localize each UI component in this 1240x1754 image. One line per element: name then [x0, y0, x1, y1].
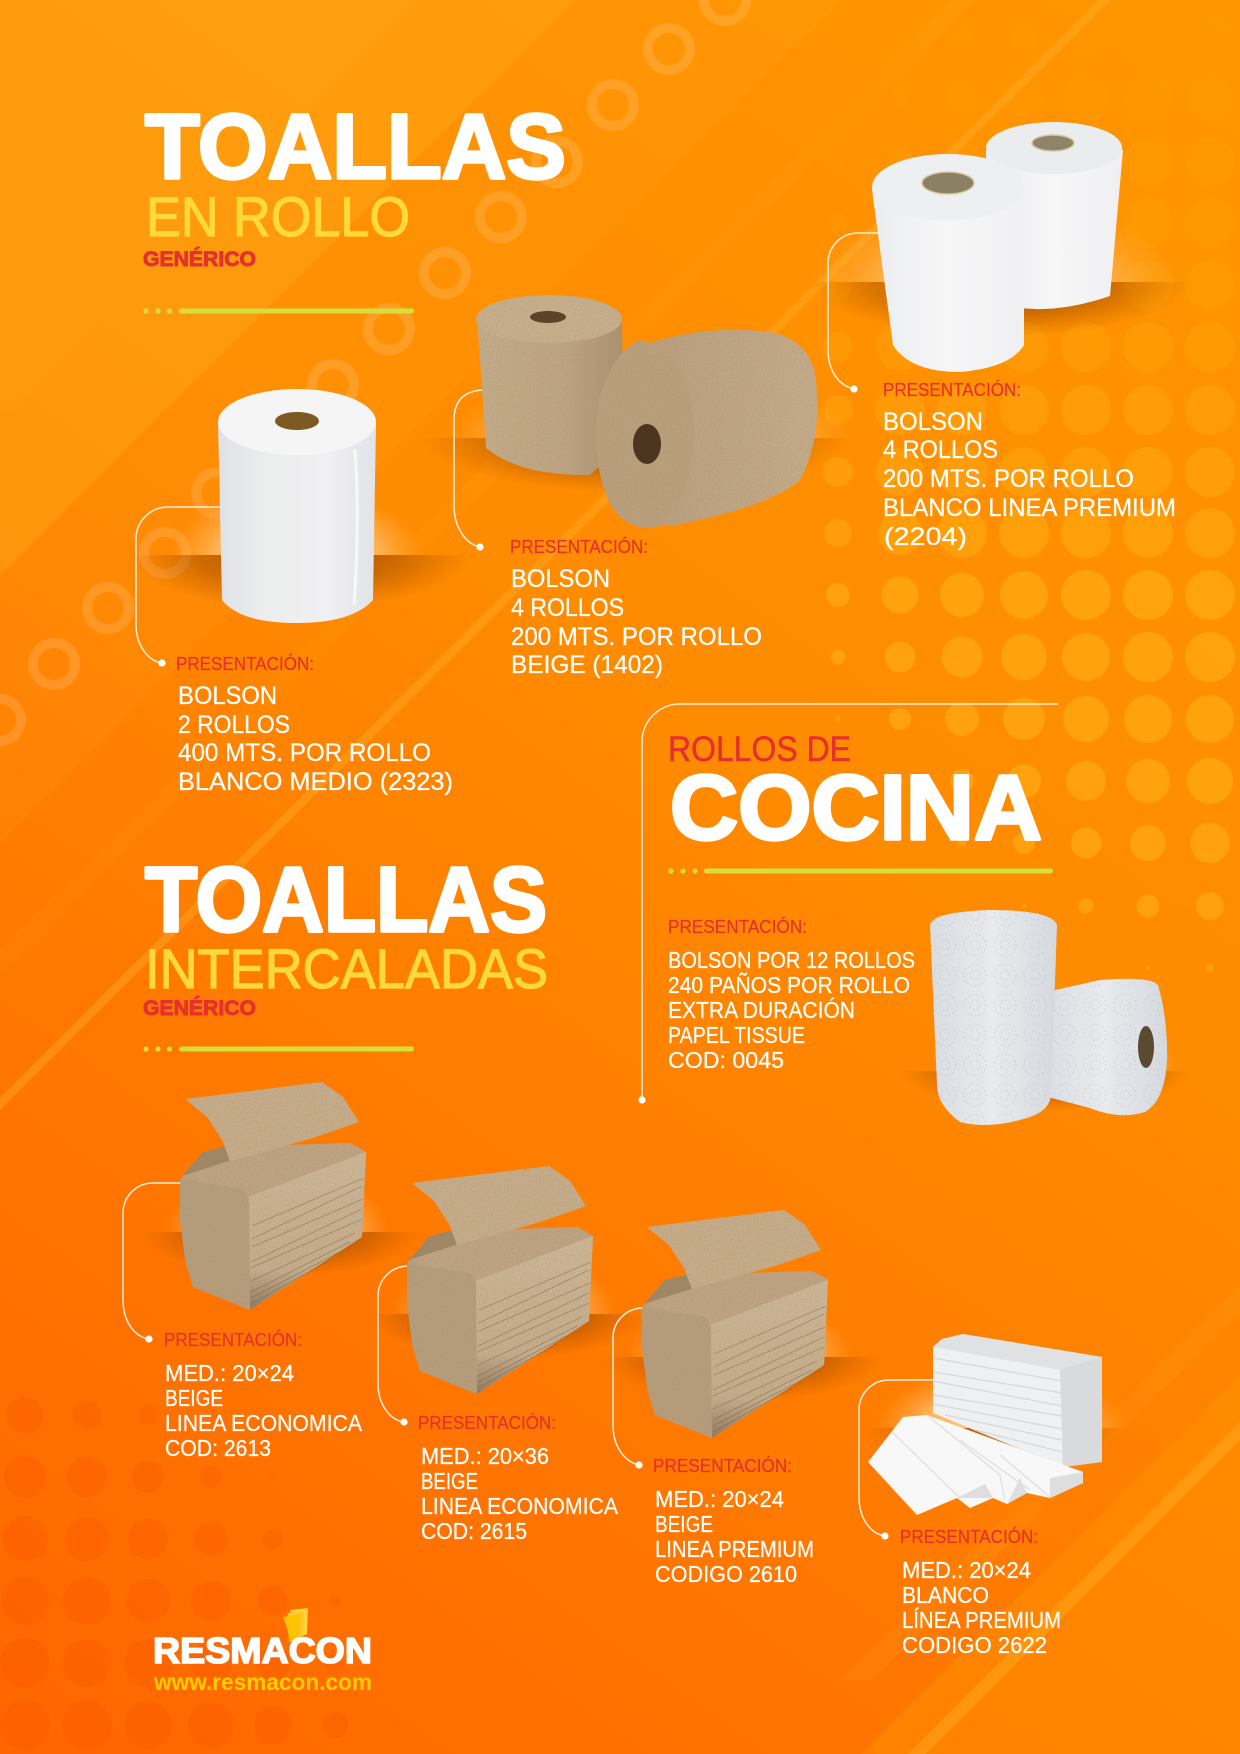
logo: resmacon [153, 1608, 372, 1695]
text: presentacion 2615: PRESENTACIÓN: [418, 1412, 556, 1433]
text: presentacion 2610: LINEA PREMIUM [655, 1536, 814, 1562]
text: presentacion 1402 [510, 536, 762, 679]
text: presentacion 2323: 2 ROLLOS [178, 711, 290, 739]
text: presentacion 2615: LINEA ECONOMICA [421, 1493, 618, 1519]
text: presentacion 2615: COD: 2615 [421, 1518, 527, 1544]
logo: resmacon: www.resmacon.com [153, 1669, 372, 1695]
text: presentacion 2613: COD: 2613 [165, 1435, 271, 1461]
heading: toallas intercaladas: GENÉRICO [143, 997, 256, 1020]
text: presentacion 2622 [900, 1526, 1061, 1658]
text: presentacion cocina: EXTRA DURACIÓN [668, 997, 855, 1023]
divider: en rollo [143, 308, 414, 314]
text: presentacion 2323: 400 MTS. POR ROLLO [178, 739, 431, 767]
text: presentacion 1402: 4 ROLLOS [511, 594, 624, 622]
text: presentacion 2610: CODIGO 2610 [655, 1561, 797, 1587]
divider: intercaladas [143, 1046, 414, 1052]
text: presentacion 2204: PRESENTACIÓN: [883, 379, 1021, 400]
callout line: cocina [642, 704, 1058, 1100]
text: presentacion 2613: PRESENTACIÓN: [164, 1329, 302, 1350]
text: presentacion 2204: BLANCO LINEA PREMIUM [883, 494, 1176, 522]
text: presentacion 2204: 4 ROLLOS [883, 436, 998, 464]
heading: toallas en rollo: EN ROLLO [146, 185, 410, 248]
text: presentacion 2622: CODIGO 2622 [902, 1632, 1047, 1658]
text: presentacion cocina: COD: 0045 [668, 1047, 784, 1073]
heading: rollos de cocina: COCINA [670, 757, 1042, 859]
text: presentacion 2615 [418, 1412, 618, 1544]
product: rolls white 2204 [810, 120, 1190, 393]
text: presentacion 2204: (2204) [884, 523, 967, 551]
text: presentacion 1402: PRESENTACIÓN: [510, 536, 648, 557]
text: presentacion cocina: BOLSON POR 12 ROLLOS [668, 947, 915, 973]
text: presentacion 2323 [176, 653, 453, 796]
text: presentacion 2613: MED.: 20×24 [165, 1360, 294, 1386]
text: presentacion 2613: LINEA ECONOMICA [165, 1410, 362, 1436]
dot pattern: top right [823, 15, 1235, 972]
text: presentacion 2323: BOLSON [178, 682, 277, 710]
text: presentacion 1402: BOLSON [511, 565, 610, 593]
heading: toallas en rollo: GENÉRICO [143, 248, 256, 271]
logo: resmacon: RESMACON [153, 1630, 372, 1671]
text: presentacion 2323: PRESENTACIÓN: [176, 653, 314, 674]
text: presentacion 2622: LÍNEA PREMIUM [902, 1607, 1061, 1633]
text: presentacion 2622: PRESENTACIÓN: [900, 1526, 1038, 1547]
text: presentacion cocina: 240 PAÑOS POR ROLLO [668, 972, 910, 998]
text: presentacion cocina: PRESENTACIÓN: [668, 916, 807, 937]
product: roll beige 1402 [420, 295, 850, 551]
text: presentacion 2204: 200 MTS. POR ROLLO [883, 465, 1134, 493]
text: presentacion 2204 [883, 379, 1176, 551]
text: presentacion 1402: 200 MTS. POR ROLLO [511, 623, 762, 651]
text: presentacion 2615: BEIGE [421, 1468, 478, 1494]
text: presentacion 2622: MED.: 20×24 [902, 1557, 1031, 1583]
text: presentacion 2610: BEIGE [655, 1511, 713, 1537]
text: presentacion 2610 [653, 1455, 814, 1587]
heading: toallas en rollo: TOALLAS [145, 96, 566, 198]
text: presentacion 2204: BOLSON [883, 408, 983, 436]
text: presentacion 2613: BEIGE [165, 1385, 223, 1411]
icon: paper stack [283, 1608, 308, 1642]
heading: toallas intercaladas: INTERCALADAS [145, 937, 548, 1000]
text: presentacion 2610: MED.: 20×24 [655, 1486, 784, 1512]
text: presentacion 2622: BLANCO [902, 1582, 989, 1608]
decorative rings [0, 0, 746, 741]
heading: toallas intercaladas: TOALLAS [145, 849, 547, 951]
heading: rollos de cocina: ROLLOS DE [668, 730, 851, 769]
dot pattern: bottom left [0, 1397, 400, 1750]
divider: cocina [668, 868, 1053, 874]
product: kitchen rolls [900, 910, 1190, 1151]
text: presentacion 2613 [164, 1329, 362, 1461]
product: box 2610 [602, 1210, 882, 1469]
heading: toallas en rollo [143, 96, 566, 271]
text: presentacion 2323: BLANCO MEDIO (2323) [178, 768, 453, 796]
product: roll blanco medio 2323 [130, 389, 470, 667]
text: presentacion 2615: MED.: 20×36 [421, 1443, 549, 1469]
text: presentacion cocina: PAPEL TISSUE [668, 1022, 805, 1048]
text: presentacion cocina [668, 916, 915, 1073]
panel: rollos de cocina [638, 704, 1190, 1151]
product: white interfold 2622 [859, 1305, 1130, 1540]
text: presentacion 2610: PRESENTACIÓN: [653, 1455, 792, 1476]
product: box 2615 [367, 1166, 647, 1426]
heading: toallas intercaladas [143, 849, 548, 1020]
callout dot: cocina [638, 1096, 646, 1104]
text: presentacion 1402: BEIGE (1402) [511, 651, 663, 679]
product: box 2613 [123, 1082, 420, 1343]
